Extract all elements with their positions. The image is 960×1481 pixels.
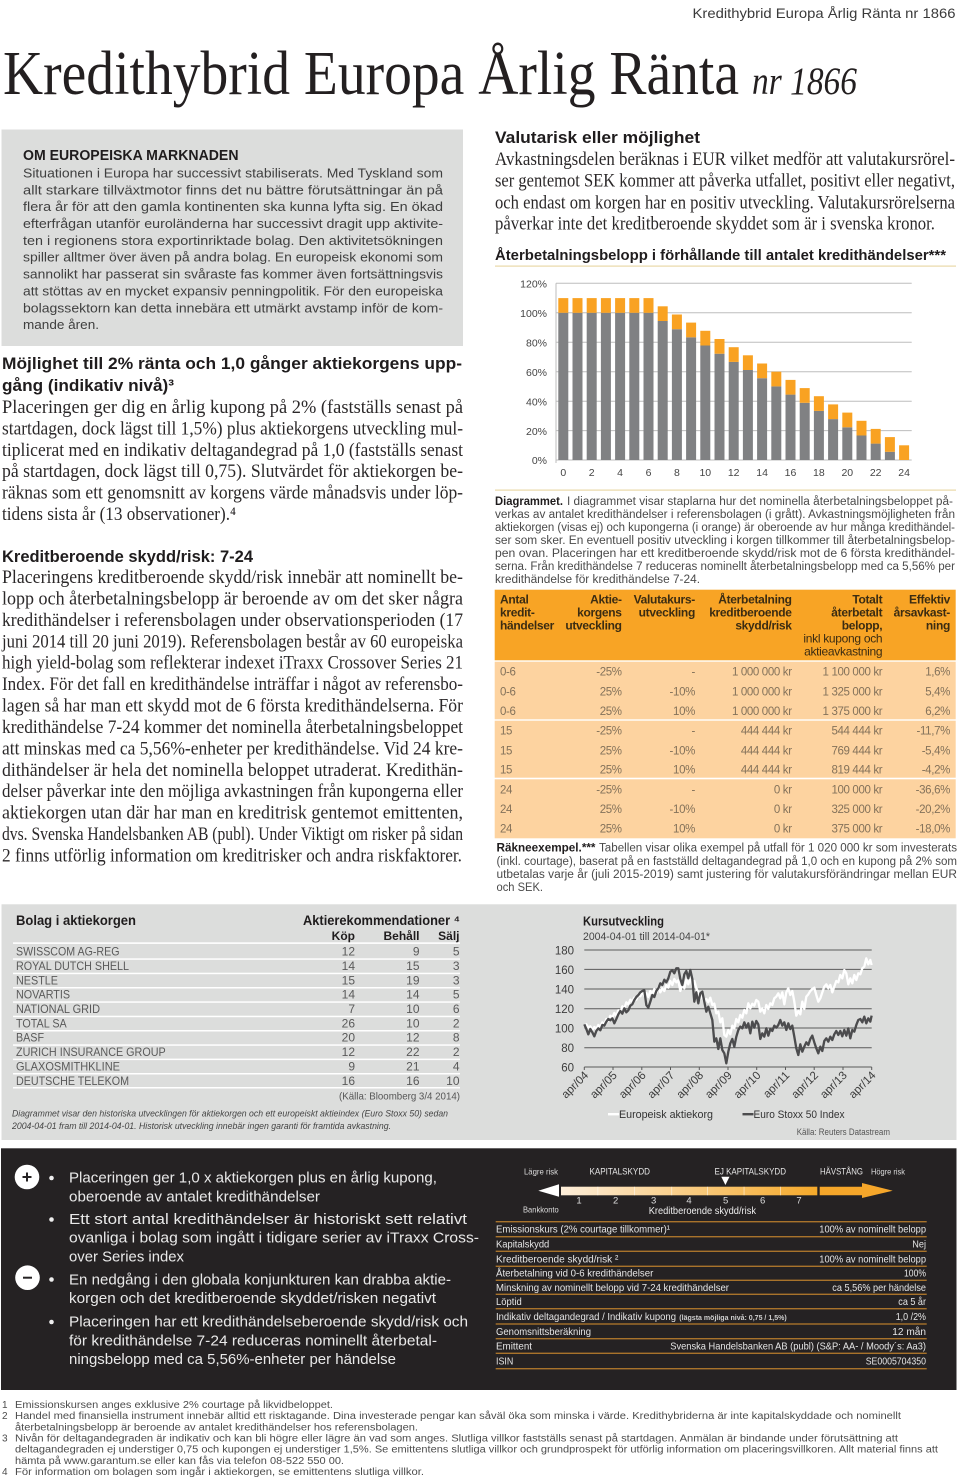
text block: kreditberoende skydd: high yield-bolag som reflekterar indexet iTraxx Crossover Series 21: [2, 654, 463, 674]
bullet list: ningsbelopp med ca 5,56%-enheter per händelse: [69, 1352, 396, 1368]
table: bolag i aktiekorgen: 15: [342, 973, 355, 987]
table: räkneexempel: 24: [500, 784, 513, 796]
table: räkneexempel: belopp,: [842, 619, 882, 633]
text block: kreditberoende skydd: kredithändelse 7-24 kommer det nominella återbetalningsbeloppet: [2, 718, 464, 738]
table: bolag i aktiekorgen: 14: [406, 988, 420, 1002]
table: räkneexempel: 1 375 000 kr: [823, 706, 883, 718]
panel: om europeiska marknaden: bolagssektorn kan detta innebära ett utmärkt avstamp inför de kom-: [23, 300, 443, 315]
table: produktfakta: Kapitalskydd: [496, 1238, 549, 1250]
table: bolag i aktiekorgen: ROYAL DUTCH SHELL: [16, 959, 129, 973]
bar chart: återbetalning: 2: [589, 467, 595, 479]
table: produktfakta: Emissionskurs (2% courtage tillkommer)¹: [496, 1224, 670, 1236]
line chart: kursutveckling: 100: [555, 1024, 574, 1036]
line chart: kursutveckling: 160: [555, 965, 574, 977]
bullet list: för kredithändelse 7-24 reduceras nominellt återbetal-: [69, 1333, 437, 1349]
table: räkneexempel: 10%: [673, 765, 695, 777]
bar chart: återbetalning: 0%: [532, 455, 547, 467]
footnotes: Handel med finansiella instrument innebär alltid ett risktagande. Dina investerade pengar kan såväl öka som minska i värde. Kredithybriderna är inte kapitalskyddade och nominellt: [15, 1410, 901, 1422]
bar chart: återbetalning: 40%: [526, 396, 547, 408]
table: räkneexempel: Totalt: [852, 592, 883, 606]
table: bolag i aktiekorgen: GLAXOSMITHKLINE: [16, 1059, 120, 1073]
table: produktfakta: Nej: [912, 1238, 926, 1250]
table: räkneexempel: 1 325 000 kr: [823, 686, 883, 698]
table: bolag i aktiekorgen: 10: [406, 1016, 420, 1030]
bar chart: återbetalning: 6: [646, 467, 652, 479]
line chart: kursutveckling: 140: [555, 984, 574, 996]
icon: minus: [15, 1265, 40, 1290]
table: räkneexempel: 544 444 kr: [831, 726, 883, 738]
line chart: kursutveckling: 80: [561, 1043, 574, 1055]
bullet list: Placeringen har ett kredithändelseberoende skydd/risk och: [69, 1315, 468, 1331]
risk scale: 2: [613, 1195, 618, 1206]
table: bolag i aktiekorgen: 21: [406, 1059, 420, 1073]
risk scale: EJ KAPITALSKYDD: [714, 1166, 786, 1177]
table: produktfakta: ISIN: [496, 1355, 513, 1367]
text block: räkneexempel: utbetalas varje år (juli 2015-2019) samt justering för valutakursförändringar mellan EUR: [496, 869, 957, 881]
footnotes: 1: [2, 1400, 8, 1411]
table: räkneexempel: 0 kr: [774, 784, 792, 796]
table: bolag i aktiekorgen: (Källa: Bloomberg 3/4 2014): [339, 1090, 460, 1102]
table: produktfakta: Indikativ deltagandegrad / Indikativ kupong: [496, 1311, 676, 1323]
panel: om europeiska marknaden: att stöttas av en mycket expansiv penningpolitik. För den europeiska: [23, 283, 444, 298]
text block: kreditberoende skydd: lagen så har man ett skydd mot de 6 första kredithändelserna. För: [2, 696, 463, 716]
table: produktfakta: Emittent: [496, 1340, 532, 1352]
risk scale: Högre risk: [871, 1167, 906, 1176]
table: räkneexempel: 1 100 000 kr: [823, 667, 883, 679]
table: produktfakta: ca 5,56% per händelse: [832, 1282, 926, 1294]
arrow: lower risk: [538, 1184, 559, 1197]
bullet list: En nedgång i den globala konjunkturen kan drabba aktie-: [69, 1272, 451, 1288]
table: räkneexempel: -20,2%: [916, 804, 950, 816]
footnotes: 3: [2, 1434, 8, 1444]
legend: [608, 1109, 845, 1121]
table: räkneexempel: -18,0%: [916, 824, 950, 836]
table: räkneexempel: 15: [500, 745, 512, 757]
table: räkneexempel: återbetalt: [831, 606, 883, 620]
table: bolag i aktiekorgen: 9: [348, 1059, 355, 1073]
table: räkneexempel: -36,6%: [916, 784, 950, 796]
risk scale: HÄVSTÅNG: [820, 1166, 863, 1177]
text block: diagrammet: ser som sker. En eventuell positiv utveckling i korgen tillkommer till återbetalningsbelop-: [495, 535, 955, 547]
heading: möjlighet: Möjlighet till 2% ränta och 1,0 gånger aktiekorgens upp-: [2, 354, 462, 373]
table: produktfakta: Kreditberoende skydd/risk ²: [496, 1253, 619, 1265]
panel: om europeiska marknaden: mande åren.: [23, 317, 99, 332]
table: bolag i aktiekorgen: 5: [453, 945, 460, 959]
panel: om europeiska marknaden: OM EUROPEISKA MARKNADEN: [23, 148, 238, 164]
table: bolag i aktiekorgen: NESTLE: [16, 973, 58, 987]
caption: diagram note: Diagrammet visar den historiska utvecklingen för aktiekorgen och ett europeiskt aktieindex (Euro Stoxx 50) sedan: [12, 1109, 448, 1120]
text block: kreditberoende skydd: kredithändelser i referensbolagen under observationsperioden (17: [2, 611, 463, 631]
text block: kreditberoende skydd: [1, 568, 464, 866]
table: räkneexempel: kreditberoende: [709, 606, 792, 620]
table: räkneexempel: 25%: [600, 765, 622, 777]
table: räkneexempel: 1 000 000 kr: [732, 667, 792, 679]
legend: Euro Stoxx 50 Index: [754, 1109, 845, 1121]
table: räkneexempel: utveckling: [639, 606, 695, 620]
text block: räkneexempel: Tabellen visar olika exempel på utfall för 1 020 000 kr som investerats: [599, 843, 957, 855]
panel: om europeiska marknaden: Situationen i Europa har successivt stabiliserats. Med Tyskland som: [23, 166, 443, 180]
bullet list: over Series index: [69, 1250, 185, 1266]
table: bolag i aktiekorgen: 7: [348, 1002, 355, 1016]
table: räkneexempel: 6,2%: [925, 706, 950, 718]
panel: om europeiska marknaden: efterfrågan utanför euroländerna har successivt dragit upp aktivite-: [23, 216, 443, 231]
text block: diagrammet: [495, 490, 956, 586]
text block: valutarisk: [495, 150, 955, 234]
risk scale: [523, 1166, 906, 1217]
line chart: kursutveckling: 2004-04-01 till 2014-04-01*: [583, 931, 711, 943]
risk scale: Kreditberoende skydd/risk: [649, 1206, 757, 1217]
table: bolag i aktiekorgen: 14: [342, 959, 355, 973]
bullet list: [49, 1171, 479, 1368]
table: bolag i aktiekorgen: Aktierekommendationer ⁴: [303, 912, 460, 928]
table: produktfakta: 100% av nominellt belopp: [819, 1253, 926, 1265]
line chart: kursutveckling: apr/05: [588, 1070, 620, 1101]
bar chart: återbetalning: 18: [813, 467, 825, 479]
table: bolag i aktiekorgen: 8: [453, 1031, 460, 1045]
heading: möjlighet: [2, 354, 462, 395]
table: bolag i aktiekorgen: 12: [406, 1031, 420, 1045]
table: räkneexempel: 24: [500, 804, 513, 816]
text block: räkneexempel: och SEK.: [496, 882, 543, 894]
text block: placeringen: Placeringen ger dig en årlig kupong på 2% (fastställs senast på: [2, 398, 463, 418]
table: räkneexempel: 15: [500, 765, 512, 777]
table: räkneexempel: -4,2%: [922, 765, 950, 777]
table: räkneexempel: 1 000 000 kr: [732, 686, 792, 698]
table: produktfakta: 12 mån: [892, 1326, 926, 1338]
icon: plus: [15, 1165, 39, 1189]
heading: återbetalningsbelopp: Återbetalningsbelopp i förhållande till antalet kredithändelser***: [495, 247, 946, 264]
risk scale: KAPITALSKYDD: [590, 1166, 650, 1177]
title: nr 1866: [752, 60, 857, 103]
table: räkneexempel: 444 444 kr: [741, 726, 792, 738]
line chart: kursutveckling: apr/06: [617, 1070, 649, 1101]
heading: kreditberoende skydd: Kreditberoende skydd/risk: 7-24: [2, 547, 254, 566]
table: bolag i aktiekorgen: 3: [453, 973, 460, 987]
bar chart: återbetalning: 10: [699, 467, 711, 479]
line chart: kursutveckling: apr/07: [646, 1070, 677, 1101]
table: bolag i aktiekorgen: 12: [342, 945, 355, 959]
bar chart: återbetalning: 16: [785, 467, 796, 479]
text block: kreditberoende skydd: Index. För det fall en kredithändelse inträffar i något av referensbo-: [2, 675, 463, 695]
table: produktfakta: 100% av nominellt belopp: [819, 1224, 926, 1236]
table: räkneexempel: -25%: [596, 667, 622, 679]
marker: risk level 5: [721, 1177, 730, 1185]
text block: kreditberoende skydd: delser påverkar inte den möjliga avkastningen från kupongerna eller: [2, 782, 463, 802]
table: bolag i aktiekorgen: Sälj: [438, 929, 460, 943]
bullet list: ovanliga i bolag som ingått i tidigare serier av iTraxx Cross-: [69, 1231, 479, 1247]
text block: diagrammet: kredithändelse för kredithändelse 7-24.: [495, 574, 700, 586]
table: räkneexempel: 25%: [600, 686, 622, 698]
table: bolag i aktiekorgen: NOVARTIS: [16, 988, 70, 1002]
table: bolag i aktiekorgen: Bolag i aktiekorgen: [16, 912, 136, 928]
table: räkneexempel: årsavkast-: [894, 606, 950, 620]
table: räkneexempel: [495, 590, 956, 838]
bullet list: Ett stort antal kredithändelser är historiskt sett relativt: [69, 1212, 467, 1228]
text block: räkneexempel: Räkneexempel.***: [496, 843, 596, 855]
text block: kreditberoende skydd: att minskas med ca 5,56%-enheter per kredithändelse. Vid 24 kre-: [2, 739, 463, 759]
caption: diagram note: [11, 1109, 448, 1132]
footnotes: hämta på www.garantum.se eller kan fås via telefon 08-522 550 00.: [15, 1455, 344, 1467]
footnotes: deltagandegraden ej understiger 0,75 och kupongen ej understiger 1,5%. Se emittentens slutliga villkor och grundprospekt för utförlig information om placeringsvillkoren. Allt material finns att: [15, 1445, 938, 1456]
table: räkneexempel: skydd/risk: [735, 619, 792, 633]
table: räkneexempel: 0-6: [500, 706, 516, 718]
table: bolag i aktiekorgen: TOTAL SA: [16, 1016, 67, 1030]
caption: diagram note: 2004-04-01 fram till 2014-04-01. Historisk utveckling innebär ingen garanti för framtida avkastning.: [11, 1121, 391, 1132]
table: bolag i aktiekorgen: 20: [342, 1031, 355, 1045]
risk scale: 5: [723, 1195, 728, 1206]
line chart: kursutveckling: 120: [555, 1004, 574, 1016]
text block: kreditberoende skydd: lopp och återbetalningsbelopp är beroende av om det sker några: [2, 589, 463, 609]
line chart: kursutveckling: 180: [555, 946, 574, 958]
text block: placeringen: på startdagen, dock lägst till 0,75). Slutvärdet för aktiekorgen be-: [2, 462, 463, 482]
table: räkneexempel: -10%: [670, 686, 695, 698]
table: bolag i aktiekorgen: 19: [406, 973, 420, 987]
panel: om europeiska marknaden: flera år för att den gamla kontinenten ska kunna lyfta sig. En ökad: [23, 199, 443, 214]
table: räkneexempel: 444 444 kr: [741, 745, 792, 757]
panel: om europeiska marknaden: allt starkare tillväxtmotor finns det nu bättre förutsättningar än på: [23, 182, 444, 197]
table: bolag i aktiekorgen: 22: [406, 1045, 420, 1059]
text block: placeringen: räknas som ett genomsnitt av korgens värde månadsvis under löp-: [2, 484, 463, 504]
table: räkneexempel: Valutakurs-: [634, 592, 695, 606]
footnotes: [2, 1399, 938, 1478]
footnotes: 4: [2, 1467, 8, 1478]
bullet list: Placeringen ger 1,0 x aktiekorgen plus en årlig kupong,: [69, 1171, 437, 1187]
table: bolag i aktiekorgen: 9: [413, 945, 420, 959]
table: produktfakta: 100%: [904, 1268, 926, 1280]
line chart: kursutveckling: apr/08: [675, 1070, 706, 1101]
table: räkneexempel: 100 000 kr: [831, 784, 883, 796]
table: produktfakta: Återbetalning vid 0-6 kredithändelser: [496, 1267, 654, 1280]
table: bolag i aktiekorgen: 16: [406, 1074, 420, 1088]
table: räkneexempel: 5,4%: [925, 686, 950, 698]
table: bolag i aktiekorgen: 12: [342, 1045, 355, 1059]
line chart: kursutveckling: apr/13: [818, 1070, 850, 1101]
panel: om europeiska marknaden: ten i regionens stora exportinriktade bolag. Den aktivitetsökningen: [23, 233, 443, 248]
table: bolag i aktiekorgen: 26: [342, 1016, 355, 1030]
footnotes: 2: [2, 1411, 8, 1422]
footnotes: återbetalningsbelopp är beroende av antalet kredithändelser hos referensbolagen.: [15, 1421, 418, 1433]
table: räkneexempel: 0-6: [500, 667, 516, 679]
bar chart: återbetalning: 24: [898, 467, 910, 479]
running header: Kredithybrid Europa Årlig Ränta nr 1866: [692, 5, 956, 21]
table: bolag i aktiekorgen: NATIONAL GRID: [16, 1002, 100, 1016]
bar chart: återbetalning: 22: [870, 467, 882, 479]
table: räkneexempel: -10%: [670, 745, 695, 757]
bar chart: återbetalning: 20%: [526, 426, 547, 438]
panel: om europeiska marknaden: [2, 130, 463, 346]
table: bolag i aktiekorgen: 16: [342, 1074, 355, 1088]
table: bolag i aktiekorgen: 14: [342, 988, 355, 1002]
line chart: kursutveckling: apr/10: [732, 1070, 764, 1101]
line chart: kursutveckling: apr/04: [560, 1069, 592, 1101]
text block: diagrammet: verkas av antalet kredithändelser i referensbolagen (i grått). Avkastningsmöjligheten från: [495, 509, 955, 521]
table: produktfakta: (lägsta möjliga nivå: 0,75 / 1,5%): [679, 1314, 787, 1322]
table: räkneexempel: 15: [500, 726, 512, 738]
risk scale: Bankkonto: [523, 1205, 559, 1215]
title: Kredithybrid Europa Årlig Ränta: [3, 40, 739, 108]
bar chart: återbetalning: 14: [756, 467, 768, 479]
table: räkneexempel: aktieavkastning: [804, 645, 882, 659]
table: räkneexempel: 1,6%: [925, 667, 950, 679]
table: räkneexempel: 444 444 kr: [741, 765, 792, 777]
table: räkneexempel: 24: [500, 824, 513, 836]
table: bolag i aktiekorgen: DEUTSCHE TELEKOM: [16, 1074, 129, 1088]
line chart: kursutveckling: apr/14: [847, 1069, 879, 1101]
table: räkneexempel: 0 kr: [774, 804, 792, 816]
footnotes: Emissionskursen anges exklusive 2% courtage på likvidbeloppet.: [15, 1399, 333, 1411]
text block: diagrammet: pen ovan. Placeringen har ett kreditberoende skydd/risk mot de 6 första kredithändel-: [495, 548, 955, 560]
bar chart: återbetalning: 0: [560, 467, 566, 479]
text block: kreditberoende skydd: juni 2014 till 20 juni 2019). Referensbolagen består av 60 europeiska: [1, 632, 463, 652]
line chart: kursutveckling: 60: [561, 1062, 574, 1074]
table: räkneexempel: Antal: [500, 592, 529, 606]
table: produktfakta: Svenska Handelsbanken AB (publ) (S&P: AA- / Moody´s: Aa3): [670, 1340, 926, 1352]
table: produktfakta: Genomsnittsberäkning: [496, 1326, 591, 1338]
table: räkneexempel: Aktie-: [590, 592, 622, 606]
line chart: kursutveckling: Kursutveckling: [583, 914, 664, 929]
text block: kreditberoende skydd: Placeringens kreditberoende skydd/risk innebär att nominellt be-: [2, 568, 463, 588]
table: räkneexempel: 0-6: [500, 686, 516, 698]
table: produktfakta: Löptid: [496, 1296, 522, 1308]
text block: räkneexempel: [496, 843, 957, 894]
table: bolag i aktiekorgen: Behåll: [383, 929, 420, 943]
line chart: kursutveckling: apr/09: [703, 1070, 735, 1101]
bullet list: oberoende av antalet kredithändelser: [69, 1190, 320, 1206]
table: produktfakta: ca 5 år: [898, 1296, 926, 1308]
table: räkneexempel: -25%: [596, 784, 622, 796]
table: räkneexempel: 769 444 kr: [831, 745, 883, 757]
bar chart: återbetalning: 60%: [526, 367, 547, 379]
panel: aktiekorg och kursutveckling: [2, 904, 956, 1140]
text block: kreditberoende skydd: aktiekorgen utan där har man en kreditrisk gentemot emittenten,: [2, 804, 463, 824]
table: bolag i aktiekorgen: Köp: [332, 929, 355, 943]
legend: Europeisk aktiekorg: [619, 1109, 713, 1121]
table: räkneexempel: 10%: [673, 824, 695, 836]
table: produktfakta: 1,0 /2%: [896, 1311, 926, 1323]
risk scale: 3: [651, 1195, 656, 1206]
table: räkneexempel: ning: [926, 619, 950, 633]
panel: dark summary: [1, 1148, 956, 1390]
table: bolag i aktiekorgen: 15: [406, 959, 420, 973]
table: räkneexempel: -10%: [670, 804, 695, 816]
table: räkneexempel: 1 000 000 kr: [732, 706, 792, 718]
text block: diagrammet: serna. Från kredithändelse 7 reduceras nominellt återbetalningsbelopp med ca 5,56% per: [495, 561, 955, 573]
table: räkneexempel: händelser: [500, 619, 555, 633]
risk scale: 1: [576, 1195, 582, 1206]
table: bolag i aktiekorgen: 2: [453, 1016, 460, 1030]
table: räkneexempel: -: [692, 784, 696, 796]
risk scale: 4: [686, 1195, 692, 1206]
table: bolag i aktiekorgen: 6: [453, 1002, 460, 1016]
text block: diagrammet: aktiekorgen (visas ej) och kupongerna (i orange) är oberoende av hur många kredithändel-: [495, 522, 955, 534]
risk scale: 6: [760, 1195, 765, 1206]
panel: om europeiska marknaden: sannolikt har passerat sin svåraste fas kommer även fortsättningsvis: [23, 267, 444, 282]
text block: diagrammet: I diagrammet visar staplarna hur det nominella återbetalningsbeloppet på-: [567, 496, 953, 508]
bar chart: återbetalning: 4: [617, 467, 623, 479]
footnotes: För information om bolagen som ingår i aktiekorgen, se emittentens slutliga villkor.: [15, 1466, 424, 1478]
table: räkneexempel: -11,7%: [917, 726, 950, 738]
table: räkneexempel: 25%: [600, 824, 622, 836]
table: räkneexempel: 10%: [673, 706, 695, 718]
bar chart: återbetalning: 12: [728, 467, 740, 479]
heading: möjlighet: gång (indikativ nivå)³: [2, 376, 174, 395]
table: bolag i aktiekorgen: ZURICH INSURANCE GROUP: [16, 1045, 166, 1059]
text block: placeringen: [2, 398, 464, 525]
text block: kreditberoende skydd: dithändelser är hela det nominella beloppet utraderat. Kredithän-: [2, 761, 463, 781]
table: produktfakta: [496, 1221, 927, 1369]
bar chart: återbetalning: 120%: [520, 278, 547, 290]
text block: placeringen: tidens sista år (13 observationer).⁴: [2, 505, 236, 525]
table: räkneexempel: 375 000 kr: [831, 824, 883, 836]
table: räkneexempel: -25%: [596, 726, 622, 738]
table: räkneexempel: -5,4%: [922, 745, 950, 757]
table: räkneexempel: 819 444 kr: [831, 765, 883, 777]
table: räkneexempel: kredit-: [500, 606, 535, 620]
text block: placeringen: startdagen, dock lägst till 1,5%) plus aktiekorgens utveckling mul-: [2, 419, 463, 439]
arrow: higher risk: [820, 1183, 893, 1198]
footnotes: Nivån för deltagandegraden är indikativ och kan bli högre eller lägre än vad som anges. Slutliga villkor fastställs senast på startdagen. Anmälan är bindande under förutsättning att: [15, 1432, 898, 1444]
table: räkneexempel: 325 000 kr: [831, 804, 883, 816]
risk scale: Lägre risk: [524, 1166, 559, 1176]
table: räkneexempel: inkl kupong och: [803, 632, 882, 646]
table: räkneexempel: Effektiv: [909, 592, 951, 606]
text block: diagrammet: Diagrammet.: [495, 496, 563, 508]
table: räkneexempel: -: [692, 667, 696, 679]
text block: kreditberoende skydd: 2 finns utförlig information om kreditrisker och andra riskfaktorer.: [2, 846, 462, 866]
table: bolag i aktiekorgen: [13, 912, 460, 1102]
table: bolag i aktiekorgen: SWISSCOM AG-REG: [16, 945, 120, 959]
bar chart: återbetalning: 100%: [520, 308, 547, 320]
table: bolag i aktiekorgen: 10: [446, 1074, 460, 1088]
bar chart: återbetalning: [520, 278, 912, 479]
text block: räkneexempel: (inkl. courtage), baserat på en fastställd deltagandegrad på 1,0 och en kupong på 2% som: [496, 856, 957, 868]
table: produktfakta: Minskning av nominellt belopp vid 7-24 kredithändelser: [496, 1282, 729, 1294]
table: räkneexempel: utveckling: [565, 619, 622, 633]
risk scale: 7: [796, 1195, 802, 1206]
line chart: kursutveckling: apr/12: [789, 1070, 821, 1101]
heading: valutarisk: Valutarisk eller möjlighet: [495, 128, 700, 147]
line chart: kursutveckling: Källa: Reuters Datastream: [797, 1127, 890, 1137]
table: produktfakta: SE0005704350: [866, 1355, 926, 1367]
table: räkneexempel: 25%: [600, 706, 622, 718]
panel: om europeiska marknaden: spiller alltmer över även på andra bolag. En europeisk ekonomi som: [23, 250, 443, 265]
text block: kreditberoende skydd: dvs. Svenska Handelsbanken AB (publ). Under Viktigt om risker på sidan: [2, 825, 463, 845]
bullet list: korgen och det kreditberoende skyddet/risken negativt: [69, 1291, 436, 1307]
bar chart: återbetalning: 20: [841, 467, 853, 479]
bar chart: återbetalning: 8: [674, 467, 680, 479]
table: räkneexempel: 25%: [600, 804, 622, 816]
table: bolag i aktiekorgen: 4: [453, 1059, 460, 1073]
table: räkneexempel: korgens: [577, 606, 622, 620]
table: räkneexempel: Återbetalning: [718, 591, 792, 606]
table: bolag i aktiekorgen: 5: [453, 988, 460, 1002]
bar chart: återbetalning: 80%: [526, 338, 547, 350]
table: räkneexempel: 0 kr: [774, 824, 792, 836]
line chart: kursutveckling: [555, 914, 890, 1137]
table: bolag i aktiekorgen: 10: [406, 1002, 420, 1016]
text block: placeringen: tiplicerat med en indikativ deltagandegrad på 1,0 (fastställs senast: [2, 441, 464, 461]
table: bolag i aktiekorgen: 2: [453, 1045, 460, 1059]
table: räkneexempel: 25%: [600, 745, 622, 757]
line chart: kursutveckling: apr/11: [761, 1070, 792, 1101]
table: bolag i aktiekorgen: BASF: [16, 1031, 44, 1045]
table: räkneexempel: -: [692, 726, 696, 738]
table: bolag i aktiekorgen: 3: [453, 959, 460, 973]
